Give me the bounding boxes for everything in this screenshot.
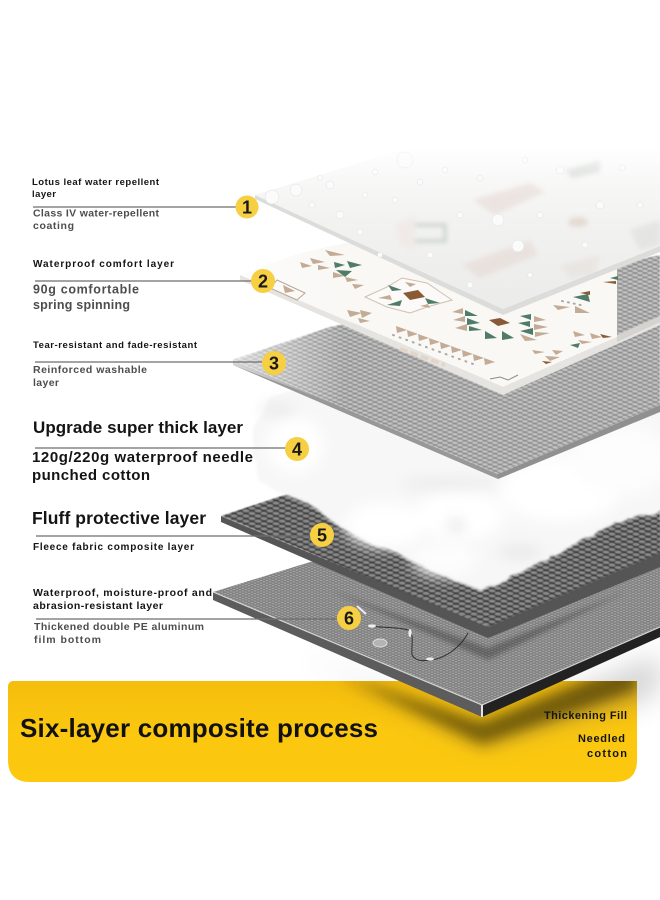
title: Six-layer composite process	[20, 713, 378, 743]
description 3	[33, 364, 147, 389]
callout 4	[32, 418, 309, 484]
badge 2	[251, 269, 275, 293]
print motif: right side	[532, 276, 618, 364]
badge 4	[285, 437, 309, 461]
faint print under the coating	[395, 160, 660, 278]
callout 3	[33, 340, 286, 389]
side note: Needled	[578, 733, 625, 745]
badge 6: 6	[344, 608, 354, 628]
print motif: triangle row	[393, 326, 518, 380]
description 1	[33, 208, 160, 232]
heading 3: Tear-resistant and fade-resistant	[33, 340, 198, 351]
layer 1: lotus leaf water repellent	[250, 125, 660, 315]
badge 1: 1	[242, 198, 252, 218]
heading 6: abrasion-resistant layer	[33, 600, 163, 612]
side note	[544, 710, 627, 760]
callout 6	[33, 587, 361, 646]
layer 3: reinforced washable	[233, 255, 660, 479]
cotton filling	[253, 384, 660, 590]
callout 5	[32, 508, 334, 553]
layer shadows	[300, 655, 660, 745]
badge 3	[262, 351, 286, 375]
heading 4: Upgrade super thick layer	[33, 418, 243, 437]
panel: yellow banner	[8, 681, 637, 782]
print motif: upper left	[270, 250, 372, 323]
description 4	[32, 449, 253, 484]
heading 6	[33, 587, 212, 612]
callout 1	[32, 177, 258, 232]
badge 4: 4	[292, 440, 302, 460]
water trail	[357, 606, 468, 661]
description 4: punched cotton	[32, 467, 150, 484]
description 2: 90g comfortable	[33, 282, 139, 296]
badge 6	[337, 606, 361, 630]
heading 6: Waterproof, moisture-proof and	[33, 587, 212, 599]
badge 5: 5	[317, 526, 327, 546]
print motif: cross	[365, 278, 452, 313]
heading 2: Waterproof comfort layer	[33, 259, 174, 270]
side note: cotton	[587, 748, 627, 760]
description 6	[34, 621, 204, 646]
heading 1: Lotus leaf water repellent	[32, 177, 160, 188]
description 3: Reinforced washable	[33, 364, 147, 376]
layer 5: fleece fabric	[221, 470, 660, 660]
badge 2: 2	[258, 272, 268, 292]
side note: Thickening Fill	[544, 710, 627, 722]
description 2: spring spinning	[33, 298, 130, 312]
layer 6: aluminum film bottom	[213, 520, 660, 717]
print motif: diamond	[452, 308, 550, 341]
layer 2: waterproof comfort print	[240, 243, 660, 395]
description 2	[33, 282, 139, 312]
description 6: Thickened double PE aluminum	[34, 621, 204, 633]
description 6: film bottom	[34, 634, 101, 646]
heading 5: Fluff protective layer	[32, 508, 206, 528]
description 3: layer	[33, 377, 59, 389]
description 1: coating	[33, 220, 74, 232]
white top fade	[250, 125, 660, 180]
heading 1: layer	[32, 189, 56, 200]
heading 1	[32, 177, 160, 200]
badge 3: 3	[269, 354, 279, 374]
callout 2	[33, 259, 275, 312]
water droplets	[265, 152, 643, 288]
badge 1	[236, 196, 258, 218]
description 5: Fleece fabric composite layer	[33, 542, 194, 553]
badge 5	[310, 523, 334, 547]
description 1: Class IV water-repellent	[33, 208, 160, 220]
description 4: 120g/220g waterproof needle	[32, 449, 253, 466]
